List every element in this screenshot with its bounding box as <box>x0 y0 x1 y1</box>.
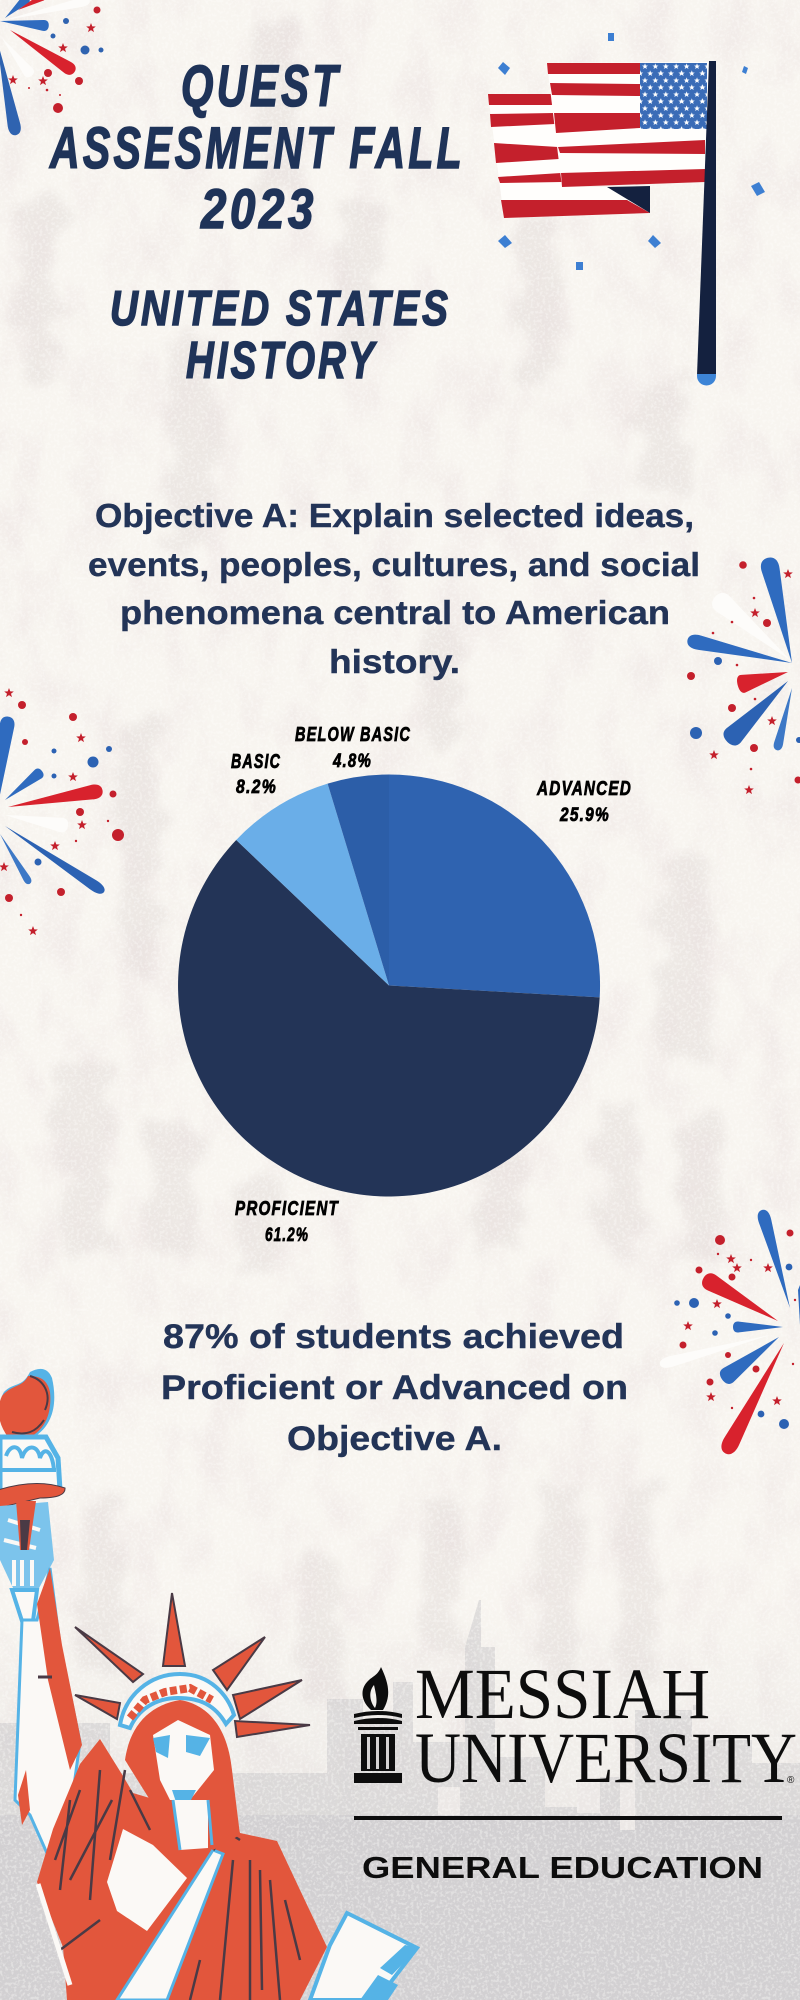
background: city skyline <box>0 1600 800 2000</box>
head and crown <box>120 1674 240 1850</box>
pie chart <box>178 774 600 1196</box>
raised arm <box>15 1568 82 1860</box>
slice: proficient 61.2% <box>178 840 600 1196</box>
logo icon <box>354 1667 402 1783</box>
robe <box>37 1739 327 2000</box>
label: advanced: ADVANCED <box>536 778 632 800</box>
illustration: statue of liberty <box>0 1369 418 2000</box>
label: basic: BASIC <box>231 751 281 773</box>
logo wordmark: ® <box>787 1775 795 1786</box>
label: below basic: BELOW BASIC <box>295 724 411 746</box>
label: basic <box>231 751 281 798</box>
subtitle <box>110 282 451 390</box>
subtitle: HISTORY <box>186 332 377 390</box>
logo rule <box>354 1816 782 1820</box>
firework: top left <box>0 0 104 136</box>
title: 2023 <box>200 177 317 240</box>
heading: objective A: phenomena central to American <box>120 594 670 631</box>
label: advanced <box>536 778 632 826</box>
logo wordmark: MESSIAH <box>415 1654 710 1734</box>
flag left fold <box>488 94 650 218</box>
label: basic: 8.2% <box>236 777 277 798</box>
logo: messiah university <box>354 1654 797 1885</box>
firework: right upper <box>686 556 800 794</box>
firework: left middle <box>0 688 124 935</box>
torch cage and handle <box>0 1437 65 1621</box>
statement: 87 percent <box>161 1318 628 1458</box>
logo wordmark <box>415 1654 797 1798</box>
logo subtitle: GENERAL EDUCATION <box>362 1850 763 1885</box>
label: below basic: 4.8% <box>332 751 372 772</box>
flag pole <box>697 61 716 375</box>
confetti <box>498 33 765 270</box>
slice: advanced 25.9% <box>389 774 600 997</box>
icon: american flag on pole <box>488 33 765 386</box>
flag right panel <box>547 62 709 213</box>
label: proficient: 61.2% <box>265 1225 309 1246</box>
heading: objective A: history. <box>329 643 460 680</box>
tablet <box>310 1913 418 2000</box>
firework: right lower <box>658 1208 800 1457</box>
slice: below basic 4.8% <box>328 774 389 986</box>
statement: 87 percent: Proficient or Advanced on <box>161 1369 628 1407</box>
statement: 87 percent: 87% of students achieved <box>163 1318 624 1356</box>
label: advanced: 25.9% <box>559 805 610 826</box>
label: proficient: PROFICIENT <box>235 1198 339 1220</box>
torch flame <box>0 1369 54 1438</box>
label: proficient <box>235 1198 339 1246</box>
crown spikes <box>75 1593 310 1737</box>
title: QUEST <box>181 54 341 119</box>
heading: objective A <box>88 497 700 680</box>
slice: basic 8.2% <box>236 784 389 986</box>
heading: objective A: events, peoples, cultures, and social <box>88 546 700 583</box>
title: ASSESMENT FALL <box>49 116 465 181</box>
title <box>49 54 465 240</box>
heading: objective A: Objective A: Explain selected ideas, <box>95 497 694 534</box>
statement: 87 percent: Objective A. <box>287 1420 502 1458</box>
subtitle: UNITED STATES <box>110 282 451 336</box>
label: below basic <box>295 724 411 772</box>
